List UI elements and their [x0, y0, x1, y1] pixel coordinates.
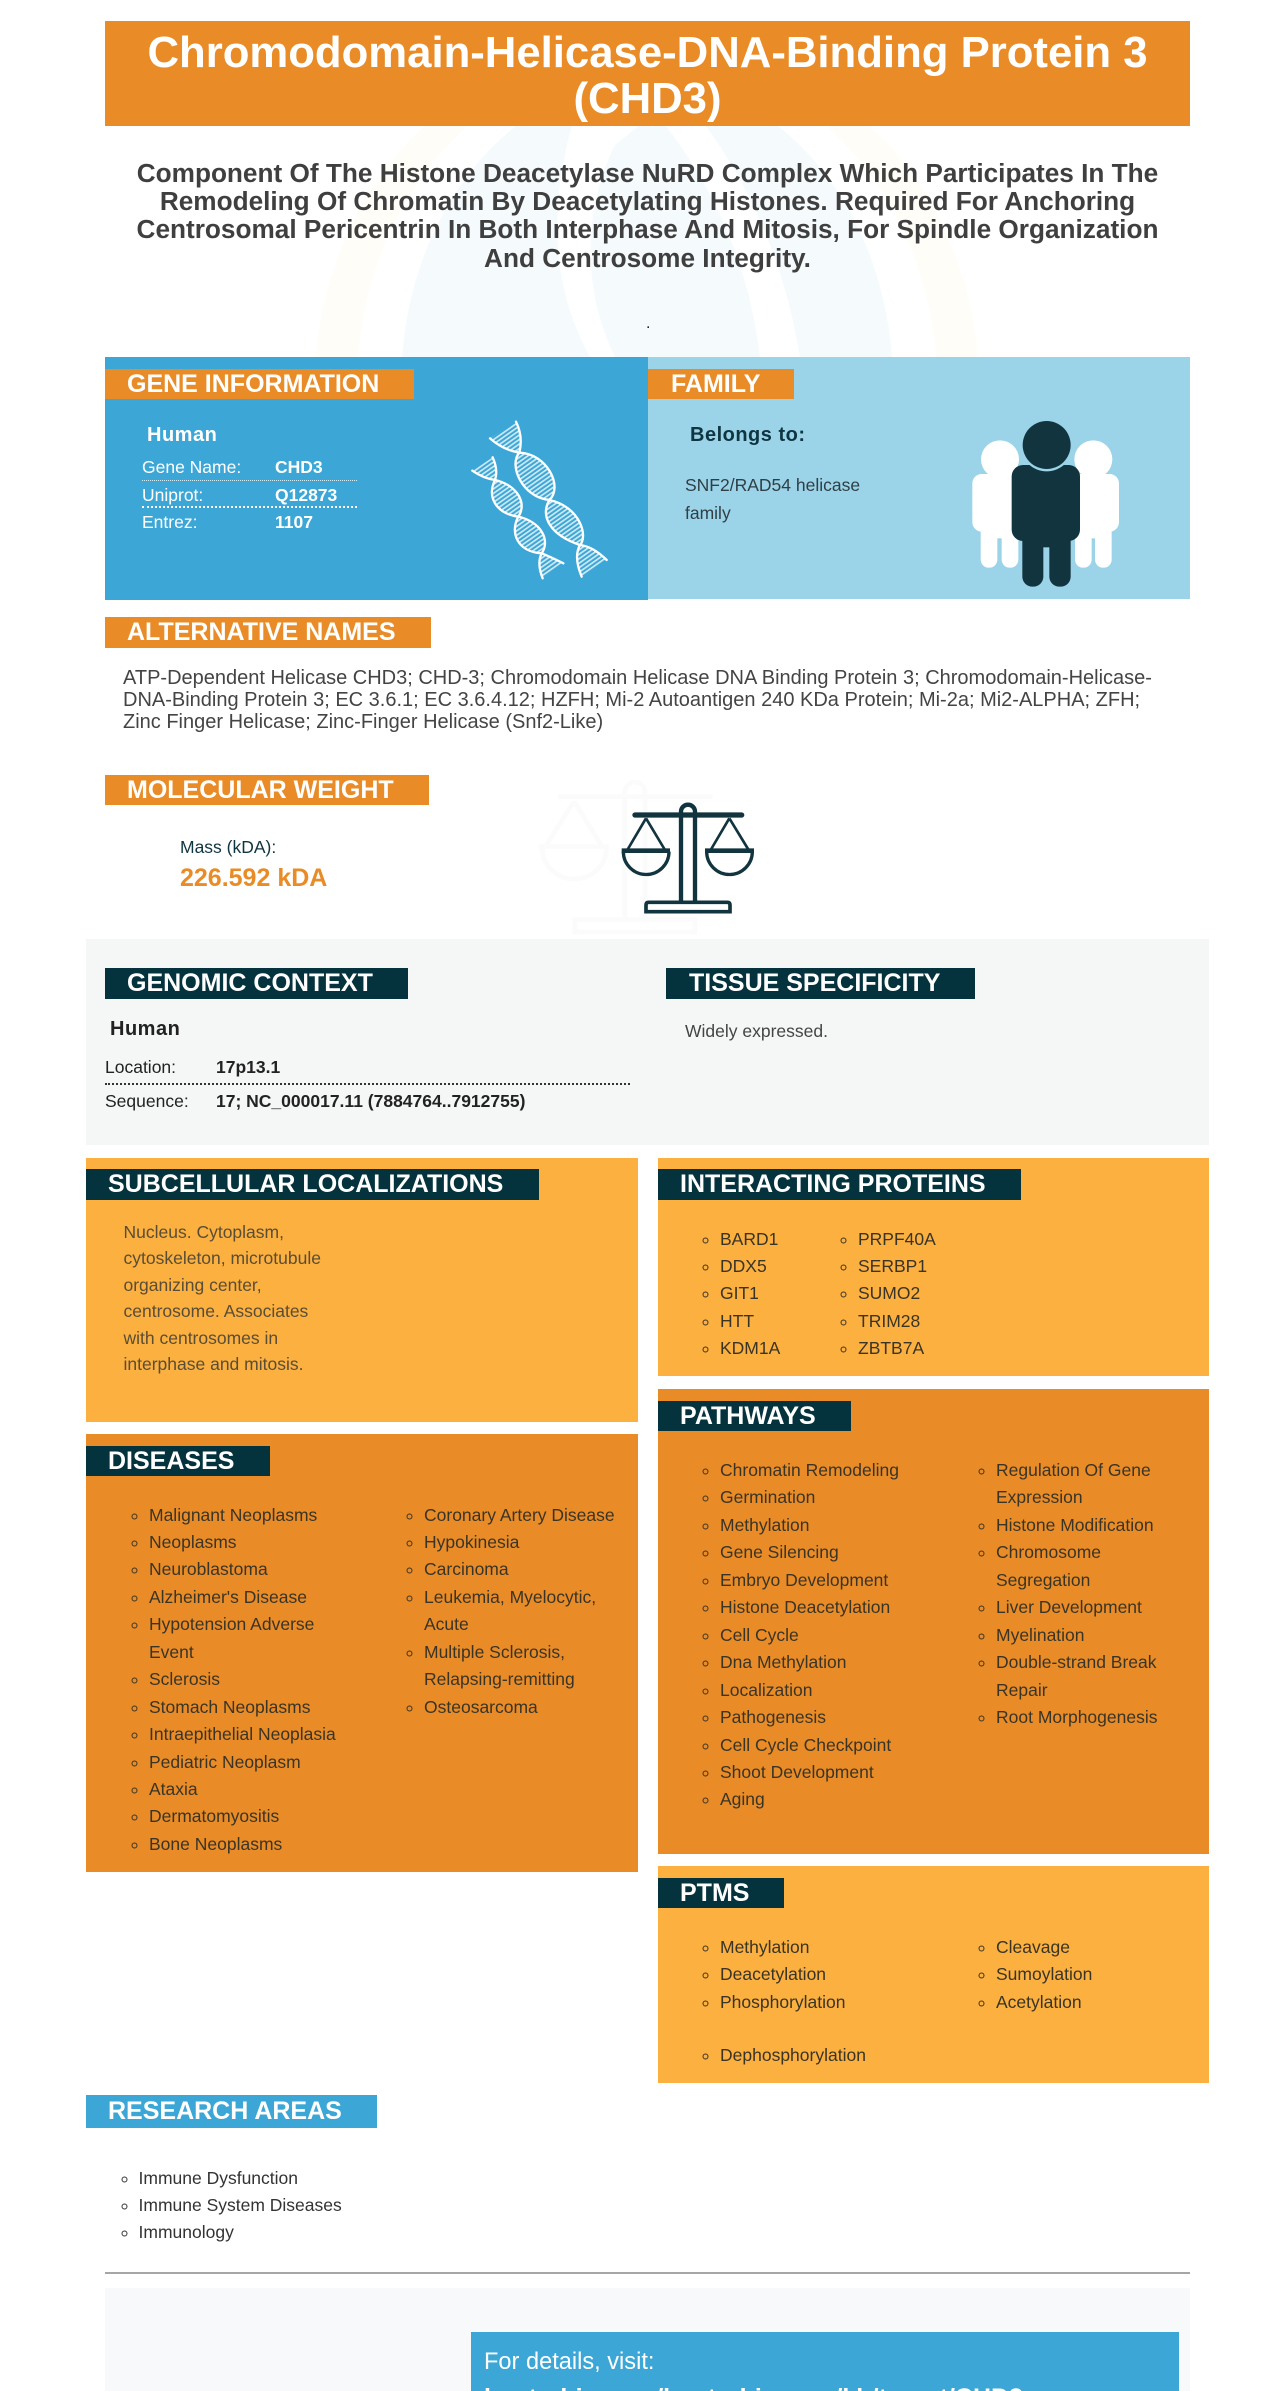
heading: interacting proteins: INTERACTING PROTEINS: [680, 1170, 986, 1198]
list: diseases column 1: Pediatric Neoplasm: [149, 1752, 301, 1772]
list: pathways column 2: Double-strand Break: [996, 1652, 1156, 1672]
species label: Human: [110, 1018, 180, 1040]
list: research areas: [122, 2168, 342, 2242]
section: research areas: [86, 2095, 377, 2242]
list: PTMs column 2: Sumoylation: [996, 1964, 1092, 1984]
section: alternative names: [105, 617, 1152, 733]
section: molecular weight: [105, 775, 429, 892]
panel: PTMs: [658, 1866, 1209, 2083]
gene name row: CHD3: [275, 456, 323, 476]
list: proteins column 1: BARD1: [720, 1228, 778, 1248]
heading: family: FAMILY: [671, 370, 760, 398]
list: PTMs column 1: Dephosphorylation: [720, 2045, 866, 2065]
panel: subcellular localizations: [86, 1158, 638, 1422]
list: PTMs column 1: Methylation: [720, 1937, 810, 1957]
heading: pathways: PATHWAYS: [680, 1402, 816, 1430]
list: diseases column 1: Sclerosis: [149, 1669, 220, 1689]
location row: Location:: [105, 1057, 176, 1077]
sequence row: 17; NC_000017.11 (7884764..7912755): [216, 1091, 525, 1111]
panel: pathways: [658, 1389, 1209, 1854]
list: pathways column 1: Localization: [720, 1680, 812, 1700]
title banner: [105, 21, 1190, 126]
heading: genomic context: GENOMIC CONTEXT: [127, 969, 373, 997]
title banner: (CHD3): [573, 74, 722, 123]
panel: gene information: [105, 357, 648, 600]
list: pathways column 2: Regulation Of Gene: [996, 1460, 1151, 1480]
list: diseases column 1: [132, 1504, 336, 1854]
icon: DNA helix: [471, 420, 608, 580]
heading: diseases: [86, 1446, 270, 1476]
list: PTMs column 1: [702, 1937, 866, 2065]
gene name row: Gene Name:: [142, 456, 241, 476]
protein description: Centrosomal Pericentrin In Both Interphase And Mitosis, For Spindle Organization: [137, 214, 1158, 244]
list: pathways column 1: Cell Cycle Checkpoint: [720, 1735, 891, 1755]
call to action text: For details, visit:: [484, 2349, 654, 2375]
subcellular localization text: interphase and mitosis.: [124, 1354, 303, 1374]
list: proteins column 1: GIT1: [720, 1283, 759, 1303]
list: pathways column 1: Germination: [720, 1487, 815, 1507]
protein description: Component Of The Histone Deacetylase NuRD Complex Which Participates In The: [137, 158, 1158, 188]
heading: subcellular localizations: SUBCELLULAR LOCALIZATIONS: [108, 1170, 503, 1198]
family text: SNF2/RAD54 helicase: [685, 475, 860, 495]
uniprot row: [142, 484, 357, 508]
list: pathways column 1: Shoot Development: [720, 1762, 874, 1782]
entrez row: [142, 512, 313, 532]
list: proteins column 2: PRPF40A: [858, 1228, 936, 1248]
icon: balance scale: [622, 802, 754, 914]
alternative names text: Zinc Finger Helicase; Zinc-Finger Helicase (Snf2-Like): [123, 711, 603, 733]
family text: family: [685, 503, 731, 523]
list: PTMs column 2: Cleavage: [996, 1937, 1070, 1957]
list: proteins column 1: KDM1A: [720, 1338, 780, 1358]
list: proteins column 2: [840, 1228, 936, 1358]
list: pathways column 2: Root Morphogenesis: [996, 1707, 1157, 1727]
list: diseases column 1: Alzheimer's Disease: [149, 1587, 307, 1607]
entrez row: Entrez:: [142, 512, 197, 532]
alternative names text: DNA-Binding Protein 3; EC 3.6.1; EC 3.6.4.12; HZFH; Mi-2 Autoantigen 240 KDa Protein; Mi-2a; Mi2-ALPHA; ZFH;: [123, 689, 1140, 711]
list: pathways column 2: Chromosome: [996, 1542, 1101, 1562]
list: pathways column 2: Histone Modification: [996, 1515, 1154, 1535]
species label: Human: [147, 424, 217, 446]
subcellular localization text: with centrosomes in: [124, 1328, 278, 1348]
list: diseases column 2: Leukemia, Myelocytic,: [424, 1587, 596, 1607]
sequence row: Sequence:: [105, 1091, 189, 1111]
list: diseases column 1: Ataxia: [149, 1779, 198, 1799]
list: pathways column 1: Histone Deacetylation: [720, 1597, 890, 1617]
heading: alternative names: ALTERNATIVE NAMES: [127, 618, 396, 646]
family text: [685, 475, 860, 523]
list: PTMs column 2: [978, 1937, 1092, 2012]
list: proteins column 2: ZBTB7A: [858, 1338, 924, 1358]
list: diseases column 1: Intraepithelial Neoplasia: [149, 1724, 336, 1744]
heading: research areas: [86, 2095, 377, 2128]
uniprot row: Uniprot:: [142, 484, 203, 504]
subcellular localization text: centrosome. Associates: [124, 1301, 308, 1321]
list: diseases column 2: Coronary Artery Disease: [424, 1504, 615, 1524]
list: diseases column 2: Acute: [424, 1614, 469, 1634]
heading: molecular weight: MOLECULAR WEIGHT: [127, 776, 394, 804]
list: diseases column 1: Event: [149, 1642, 194, 1662]
heading: pathways: [658, 1401, 851, 1431]
list: pathways column 1: Embryo Development: [720, 1570, 888, 1590]
list: research areas: Immunology: [138, 2222, 234, 2242]
list: pathways column 1: Gene Silencing: [720, 1542, 839, 1562]
alternative names text: [123, 667, 1152, 733]
gene name row: [142, 456, 357, 481]
panel: interacting proteins: [658, 1158, 1209, 1376]
list: diseases column 2: Relapsing-remitting: [424, 1669, 575, 1689]
location row: [105, 1057, 630, 1085]
panel: diseases: [86, 1434, 638, 1872]
list: diseases column 1: Malignant Neoplasms: [149, 1504, 317, 1524]
title banner: Chromodomain-Helicase-DNA-Binding Protein 3: [147, 28, 1148, 77]
list: diseases column 1: Neuroblastoma: [149, 1559, 268, 1579]
heading: PTMs: PTMS: [680, 1879, 749, 1907]
list: diseases column 2: Osteosarcoma: [424, 1697, 538, 1717]
protein description: Remodeling Of Chromatin By Deacetylating Histones. Required For Anchoring: [160, 186, 1135, 216]
list: proteins column 1: DDX5: [720, 1256, 767, 1276]
heading: PTMs: [658, 1878, 784, 1908]
subcellular localization text: cytoskeleton, microtubule: [124, 1248, 321, 1268]
heading: family: [648, 369, 794, 399]
list: pathways column 1: Cell Cycle: [720, 1625, 799, 1645]
subcellular localization text: Nucleus. Cytoplasm,: [124, 1222, 284, 1242]
protein description: And Centrosome Integrity.: [484, 243, 811, 273]
heading: diseases: DISEASES: [108, 1447, 234, 1475]
list: pathways column 1: Methylation: [720, 1515, 810, 1535]
list: pathways column 2: Liver Development: [996, 1597, 1142, 1617]
subcellular localization text: organizing center,: [124, 1275, 262, 1295]
uniprot row: Q12873: [275, 484, 337, 504]
list: diseases column 2: Hypokinesia: [424, 1532, 519, 1552]
list: pathways column 1: Aging: [720, 1789, 765, 1809]
panel: family: [648, 357, 1190, 599]
list: pathways column 2: Repair: [996, 1680, 1048, 1700]
panel: footer: [105, 2288, 1190, 2391]
callout: details link: [471, 2332, 1179, 2391]
list: PTMs column 1: Deacetylation: [720, 1964, 826, 1984]
mass value: 226.592 kDA: [180, 864, 327, 892]
mass label: Mass (kDA):: [180, 837, 276, 857]
list: proteins column 2: TRIM28: [858, 1311, 920, 1331]
list: PTMs column 2: Acetylation: [996, 1992, 1082, 2012]
list: pathways column 2: [978, 1460, 1157, 1727]
list: diseases column 1: Stomach Neoplasms: [149, 1697, 310, 1717]
list: diseases column 1: Bone Neoplasms: [149, 1834, 282, 1854]
list: pathways column 1: Dna Methylation: [720, 1652, 846, 1672]
subcellular localization text: [124, 1222, 321, 1374]
heading: research areas: RESEARCH AREAS: [108, 2097, 342, 2125]
tissue specificity text: Widely expressed.: [685, 1021, 828, 1041]
list: proteins column 2: SERBP1: [858, 1256, 927, 1276]
list: pathways column 1: Pathogenesis: [720, 1707, 826, 1727]
list: diseases column 1: Dermatomyositis: [149, 1806, 279, 1826]
list: pathways column 2: Expression: [996, 1487, 1083, 1507]
list: diseases column 1: Hypotension Adverse: [149, 1614, 314, 1634]
alternative names text: ATP-Dependent Helicase CHD3; CHD-3; Chromodomain Helicase DNA Binding Protein 3; Chromodomain-Helicase-: [123, 667, 1152, 689]
list: proteins column 1: [702, 1228, 780, 1358]
heading: tissue specificity: TISSUE SPECIFICITY: [689, 969, 940, 997]
background watermark logo: [402, 126, 892, 357]
small dot text: .: [646, 315, 650, 332]
list: proteins column 1: HTT: [720, 1311, 754, 1331]
list: research areas: Immune System Diseases: [138, 2195, 342, 2215]
list: diseases column 1: Neoplasms: [149, 1532, 237, 1552]
list: diseases column 2: Multiple Sclerosis,: [424, 1642, 565, 1662]
icon: group of people: [972, 421, 1119, 587]
belongs to label: Belongs to:: [690, 424, 806, 446]
list: pathways column 2: Myelination: [996, 1625, 1085, 1645]
list: pathways column 1: Chromatin Remodeling: [720, 1460, 899, 1480]
ghost scale: [539, 782, 713, 932]
entrez row: 1107: [275, 512, 313, 532]
list: pathways column 1: [702, 1460, 899, 1809]
list: pathways column 2: Segregation: [996, 1570, 1090, 1590]
list: PTMs column 1: Phosphorylation: [720, 1992, 846, 2012]
protein description: [137, 158, 1158, 273]
list: diseases column 2: [406, 1504, 615, 1717]
heading: gene information: GENE INFORMATION: [127, 370, 379, 398]
list: diseases column 2: Carcinoma: [424, 1559, 509, 1579]
list: proteins column 2: SUMO2: [858, 1283, 920, 1303]
location row: 17p13.1: [216, 1057, 280, 1077]
list: research areas: Immune Dysfunction: [138, 2168, 298, 2188]
panel: genomic context and tissue specificity: [86, 939, 1209, 1145]
